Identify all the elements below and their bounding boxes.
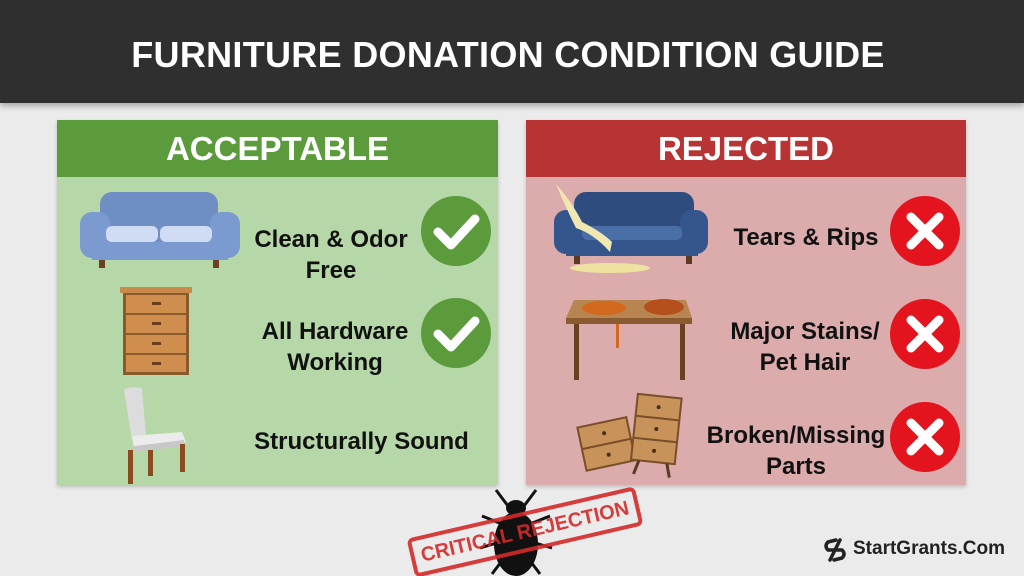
text: broken / missing parts: Broken/Missing <box>707 422 885 449</box>
text: clean & odor free: Clean & Odor <box>254 226 408 253</box>
panel: acceptable <box>57 120 498 485</box>
title: FURNITURE DONATION CONDITION GUIDE <box>131 34 885 75</box>
icon: sofa <box>80 192 240 268</box>
logo: startgrants <box>824 538 1005 562</box>
text: all hardware working <box>262 318 408 376</box>
icon: stained table <box>566 299 692 380</box>
stamp: critical rejection <box>406 486 644 576</box>
icon: broken dressers <box>576 392 683 478</box>
text: major stains / pet hair <box>730 318 880 376</box>
text: major stains / pet hair: Major Stains/ <box>730 318 880 345</box>
text: major stains / pet hair: Pet Hair <box>760 349 850 376</box>
heading: acceptable <box>57 120 498 177</box>
heading: rejected: REJECTED <box>658 130 834 167</box>
text: clean & odor free <box>254 226 408 284</box>
text: clean & odor free: Free <box>306 257 356 284</box>
text: broken / missing parts <box>707 422 885 480</box>
stamp: critical rejection: CRITICAL REJECTION <box>419 497 631 567</box>
icon: check 2 <box>421 298 491 368</box>
title bar <box>0 0 1024 103</box>
heading: rejected <box>526 120 966 177</box>
text: startgrants.com: StartGrants.Com <box>853 538 1005 559</box>
icon: x 3 <box>890 402 960 472</box>
icon: x 2 <box>890 299 960 369</box>
panel: rejected <box>526 120 966 485</box>
text: all hardware working: Working <box>287 349 383 376</box>
text: tears & rips: Tears & Rips <box>734 224 878 251</box>
icon: x 1 <box>890 196 960 266</box>
icon: check 1 <box>421 196 491 266</box>
text: broken / missing parts: Parts <box>766 453 826 480</box>
text: all hardware working: All Hardware <box>262 318 408 345</box>
icon: logo mark <box>824 538 846 562</box>
heading: acceptable: ACCEPTABLE <box>166 130 389 167</box>
text: structurally sound: Structurally Sound <box>254 428 469 455</box>
icon: bed bug <box>480 489 552 576</box>
icon: dresser <box>120 287 192 375</box>
icon: torn sofa <box>554 184 708 273</box>
icon: chair <box>124 387 186 484</box>
